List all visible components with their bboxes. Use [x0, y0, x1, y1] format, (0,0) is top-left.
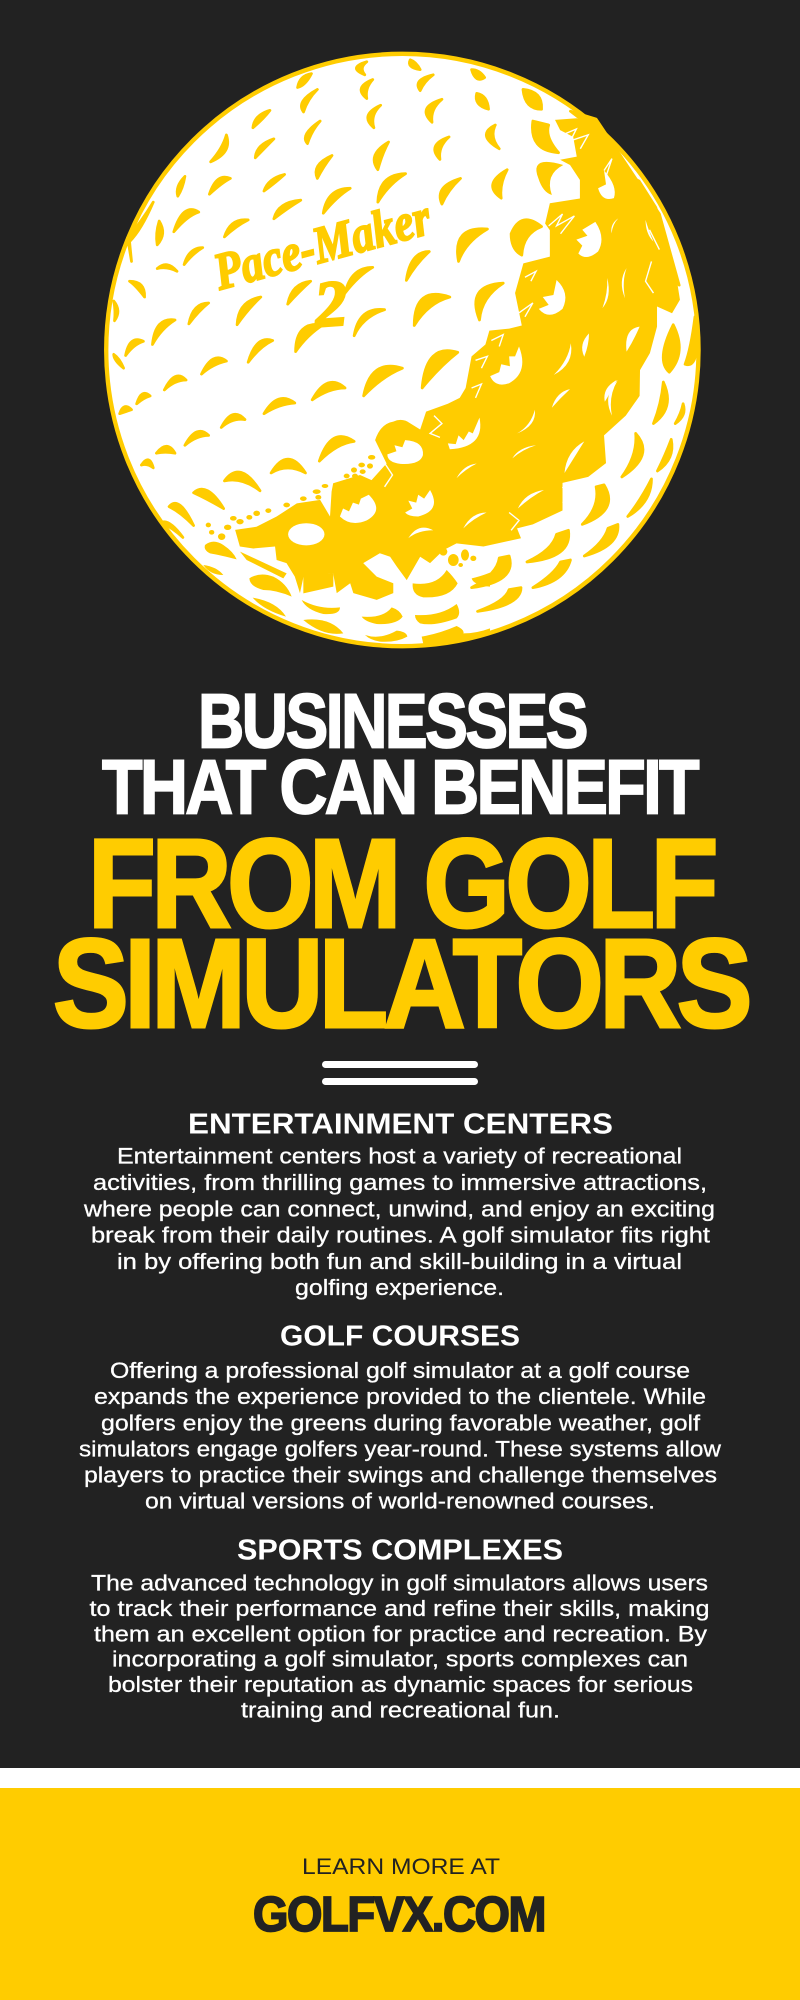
- section: sports complexes: [90, 1534, 710, 1723]
- footer panel: [0, 1788, 800, 2000]
- text block: golf courses body: on virtual versions of world-renowned courses.: [145, 1489, 655, 1514]
- ball label: Pace-Maker 2: [207, 188, 437, 342]
- illustration: golf ball: [106, 54, 699, 646]
- heading: golf courses: GOLF COURSES: [280, 1320, 520, 1352]
- title: from golf simulators: FROM GOLF: [88, 813, 715, 954]
- ball dimples in white zone: [114, 60, 697, 611]
- heading: sports complexes: SPORTS COMPLEXES: [237, 1534, 563, 1566]
- title: businesses that can benefit: THAT CAN BENEFIT: [102, 744, 700, 830]
- text block: entertainment centers body: [83, 1144, 715, 1300]
- text block: golf courses body: expands the experience provided to the clientele. While: [94, 1384, 706, 1409]
- footer text: learn more at: LEARN MORE AT: [302, 1854, 500, 1879]
- divider: double rule: [322, 1061, 478, 1085]
- text block: golf courses body: [79, 1358, 722, 1514]
- title: businesses that can benefit: BUSINESSES: [198, 678, 587, 764]
- text block: golf courses body: golfers enjoy the greens during favorable weather, golf: [101, 1411, 701, 1436]
- text block: golf courses body: simulators engage golfers year-round. These systems allow: [79, 1437, 722, 1462]
- ball label: Pace-Maker 2: Pace-Maker: [207, 188, 437, 302]
- section: golf courses: [79, 1320, 722, 1514]
- heading: entertainment centers: ENTERTAINMENT CENTERS: [188, 1108, 613, 1140]
- text block: sports complexes body: incorporating a golf simulator, sports complexes can: [112, 1647, 688, 1672]
- text block: sports complexes body: training and recreational fun.: [241, 1698, 560, 1723]
- text block: golf courses body: players to practice their swings and challenge themselves: [84, 1463, 717, 1488]
- title: from golf simulators: [53, 813, 749, 1054]
- footer text: website: GOLFVX.COM: [253, 1888, 545, 1942]
- ball lower-left fragments: [203, 455, 490, 644]
- ball label: Pace-Maker 2: 2: [311, 268, 350, 342]
- ball shaded band: [235, 118, 680, 600]
- text block: entertainment centers body: where people can connect, unwind, and enjoy an exciting: [83, 1197, 715, 1222]
- text block: entertainment centers body: break from their daily routines. A golf simulator fits right: [91, 1223, 711, 1248]
- text block: entertainment centers body: Entertainment centers host a variety of recreational: [117, 1144, 682, 1169]
- title: businesses that can benefit: [102, 678, 700, 830]
- text block: entertainment centers body: activities, from thrilling games to immersive attractions,: [93, 1170, 707, 1195]
- text block: sports complexes body: to track their performance and refine their skills, making: [90, 1596, 710, 1621]
- text block: golf courses body: Offering a professional golf simulator at a golf course: [110, 1358, 690, 1383]
- section: entertainment centers: [83, 1108, 715, 1300]
- text block: sports complexes body: bolster their reputation as dynamic spaces for serious: [108, 1672, 693, 1697]
- text block: entertainment centers body: golfing experience.: [295, 1275, 504, 1300]
- text block: sports complexes body: [90, 1571, 710, 1723]
- text block: entertainment centers body: in by offering both fun and skill-building in a virtual: [117, 1249, 682, 1274]
- text block: sports complexes body: them an excellent option for practice and recreation. By: [94, 1622, 708, 1647]
- text block: sports complexes body: The advanced technology in golf simulators allows users: [91, 1571, 708, 1596]
